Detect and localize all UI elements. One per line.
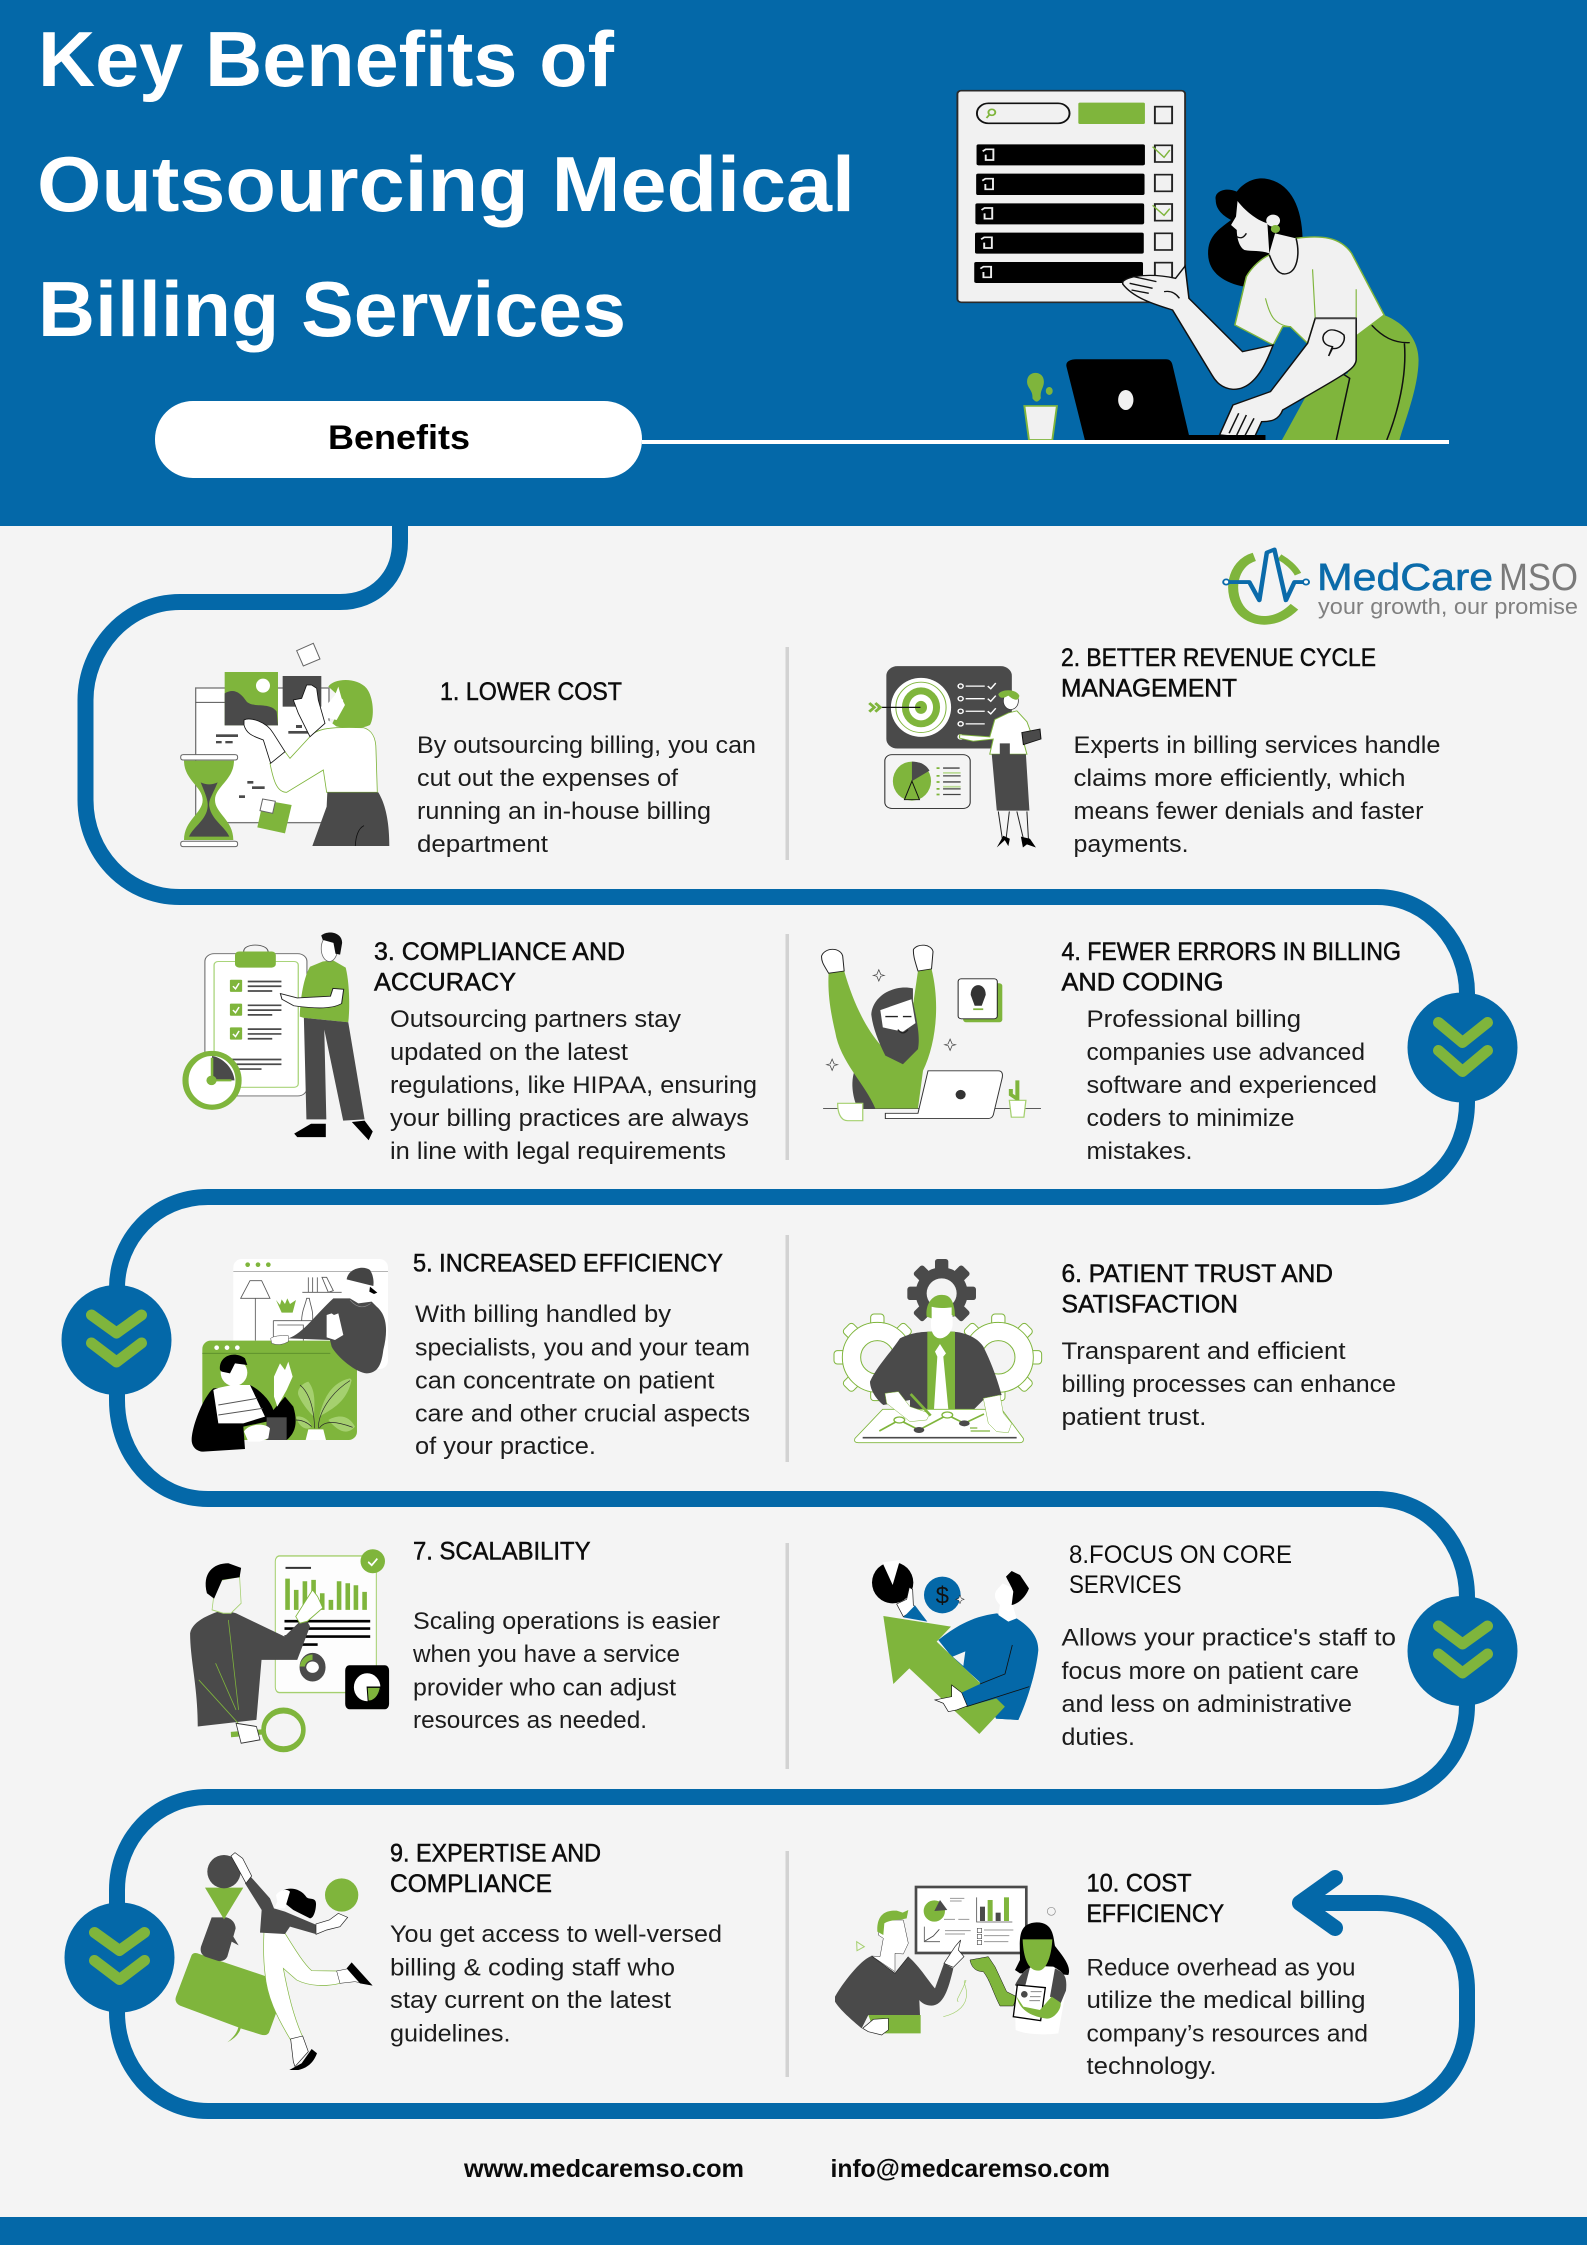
footer contacts: www.medcaremso.com <box>463 2155 744 2183</box>
body 8: focus more on patient care <box>1062 1658 1359 1685</box>
heading 9 <box>390 1840 601 1898</box>
body 4 <box>1086 1006 1377 1165</box>
pill label: Benefits <box>155 401 642 478</box>
body 9: You get access to well-versed <box>390 1921 722 1948</box>
body 2: means fewer denials and faster <box>1074 798 1424 825</box>
body 6 <box>1062 1338 1396 1431</box>
body 10: Reduce overhead as you <box>1086 1954 1356 1982</box>
heading 10 <box>1086 1870 1224 1928</box>
body 10: company’s resources and <box>1086 2020 1368 2048</box>
body 5 <box>415 1301 750 1460</box>
logo: MedCare MSO: MedCare <box>1317 557 1493 599</box>
heading 4: 4. FEWER ERRORS IN BILLING <box>1062 938 1401 966</box>
title: Billing Services <box>38 265 626 353</box>
body 6: patient trust. <box>1062 1404 1206 1431</box>
heading 8 <box>1069 1541 1292 1599</box>
body 7: when you have a service <box>412 1641 680 1668</box>
body 6: Transparent and efficient <box>1062 1338 1346 1365</box>
panel: 8 focus on core services <box>872 1541 1396 1751</box>
heading 5: 5. INCREASED EFFICIENCY <box>413 1250 723 1278</box>
chevron badge left 2 <box>64 1902 174 2012</box>
icon: woman presenting target board <box>869 666 1041 847</box>
heading 2: MANAGEMENT <box>1061 674 1237 702</box>
heading 3: ACCURACY <box>374 968 516 996</box>
body 7 <box>412 1608 720 1734</box>
panel: 5 increased efficiency <box>192 1250 750 1460</box>
body 2 <box>1074 732 1440 858</box>
body 3: your billing practices are always <box>390 1105 749 1132</box>
body 7: provider who can adjust <box>413 1674 676 1702</box>
icon: two colleagues at a chart board <box>835 1887 1069 2035</box>
heading 8: SERVICES <box>1069 1571 1182 1599</box>
body 10: technology. <box>1086 2053 1216 2080</box>
heading 8: 8.FOCUS ON CORE <box>1069 1541 1292 1569</box>
title: Key Benefits of <box>38 15 615 103</box>
serpentine connector path <box>86 526 1467 2111</box>
body 2: Experts in billing services handle <box>1074 732 1440 759</box>
body 4: software and experienced <box>1086 1072 1377 1099</box>
body 1: department <box>417 831 548 858</box>
logo: MedCare MSO: your growth, our promise <box>1318 594 1578 619</box>
footer band <box>0 2217 1587 2245</box>
heading 9: COMPLIANCE <box>390 1870 552 1898</box>
body 7: resources as needed. <box>413 1707 647 1734</box>
body 9 <box>390 1921 722 2048</box>
pill label: Benefits: Benefits <box>328 419 470 457</box>
body 10: utilize the medical billing <box>1086 1987 1366 2014</box>
chevron badge right 2 <box>1408 1596 1518 1706</box>
logo mark <box>1223 549 1309 620</box>
body 8: Allows your practice's staff to <box>1062 1624 1396 1652</box>
heading 4 <box>1062 938 1401 996</box>
body 3: Outsourcing partners stay <box>390 1006 681 1033</box>
body 5: can concentrate on patient <box>415 1368 715 1394</box>
panel: 2 revenue cycle <box>869 644 1440 858</box>
body 5: specialists, you and your team <box>415 1334 750 1362</box>
body 5: care and other crucial aspects <box>415 1400 750 1428</box>
footer contacts: info@medcaremso.com <box>830 2155 1110 2183</box>
title <box>37 15 855 353</box>
icon: bearded man celebrating at laptop <box>822 945 1041 1121</box>
heading 3: 3. COMPLIANCE AND <box>374 938 625 966</box>
arrow head <box>1300 1878 1335 1928</box>
logo: MedCare MSO: MSO <box>1499 557 1578 599</box>
heading 2 <box>1061 644 1376 702</box>
panel: 10 cost efficiency <box>835 1870 1368 2080</box>
panel: 9 expertise and compliance <box>175 1840 722 2070</box>
body 8: and less on administrative <box>1062 1691 1352 1718</box>
footer contacts <box>463 2155 1110 2183</box>
body 8 <box>1062 1624 1396 1751</box>
icon: businessman with gears and chart <box>834 1259 1042 1443</box>
icon: man with clipboard and clock <box>186 932 373 1140</box>
body 4: coders to minimize <box>1086 1105 1294 1132</box>
heading 10: 10. COST <box>1086 1870 1192 1898</box>
white rule <box>642 440 1449 444</box>
body 2: payments. <box>1074 831 1188 858</box>
chevron badge right 1 <box>1408 992 1518 1102</box>
body 1: cut out the expenses of <box>417 765 678 792</box>
body 5: With billing handled by <box>415 1301 671 1328</box>
icon: woman arranging pictures with hourglass <box>181 643 389 847</box>
panel: 1 lower cost <box>181 643 756 858</box>
icon: man reviewing chart with magnifier <box>190 1549 389 1749</box>
body 4: Professional billing <box>1086 1006 1301 1033</box>
heading 2: 2. BETTER REVENUE CYCLE <box>1061 644 1376 672</box>
body 1: running an in-house billing <box>417 798 711 825</box>
icon: man holding large arrow <box>872 1560 1038 1734</box>
heading 1: 1. LOWER COST <box>440 678 622 706</box>
body 9: stay current on the latest <box>390 1987 671 2014</box>
body 9: guidelines. <box>390 2020 510 2048</box>
body 7: Scaling operations is easier <box>413 1608 720 1635</box>
header band <box>0 0 1587 526</box>
body 3: in line with legal requirements <box>390 1138 726 1165</box>
body 1 <box>417 732 756 858</box>
icon: woman balancing shapes <box>175 1853 373 2070</box>
body 10 <box>1086 1954 1368 2080</box>
heading 9: 9. EXPERTISE AND <box>390 1840 601 1868</box>
heading 6: 6. PATIENT TRUST AND <box>1062 1260 1333 1288</box>
heading 7: 7. SCALABILITY <box>413 1538 591 1566</box>
icon: man holding large arrow: $ <box>936 1582 949 1609</box>
body 4: mistakes. <box>1086 1138 1192 1165</box>
body 8: duties. <box>1062 1724 1135 1751</box>
heading 10: EFFICIENCY <box>1086 1900 1224 1928</box>
chevron badge left 1 <box>62 1285 172 1395</box>
heading 4: AND CODING <box>1062 968 1224 996</box>
panel: 6 patient trust <box>834 1259 1396 1443</box>
icon: two people in video call windows <box>192 1259 388 1452</box>
body 6: billing processes can enhance <box>1062 1371 1396 1398</box>
body 5: of your practice. <box>415 1433 596 1460</box>
heading 3 <box>374 938 625 996</box>
body 3: updated on the latest <box>390 1039 628 1066</box>
body 9: billing & coding staff who <box>390 1954 675 1982</box>
logo: MedCare MSO <box>1223 549 1578 620</box>
title: Outsourcing Medical <box>37 140 855 228</box>
body 2: claims more efficiently, which <box>1074 765 1406 792</box>
panel: 4 fewer errors <box>822 938 1401 1165</box>
heading 6 <box>1062 1260 1333 1318</box>
body 4: companies use advanced <box>1086 1039 1365 1066</box>
body 3: regulations, like HIPAA, ensuring <box>390 1072 757 1099</box>
header illustration: woman with checklist and laptop <box>957 91 1419 440</box>
heading 6: SATISFACTION <box>1062 1290 1238 1318</box>
dividers <box>786 647 789 2077</box>
panel: 7 scalability <box>190 1538 720 1749</box>
panel: 3 compliance <box>186 932 757 1165</box>
body 1: By outsourcing billing, you can <box>417 732 756 759</box>
body 3 <box>390 1006 757 1165</box>
